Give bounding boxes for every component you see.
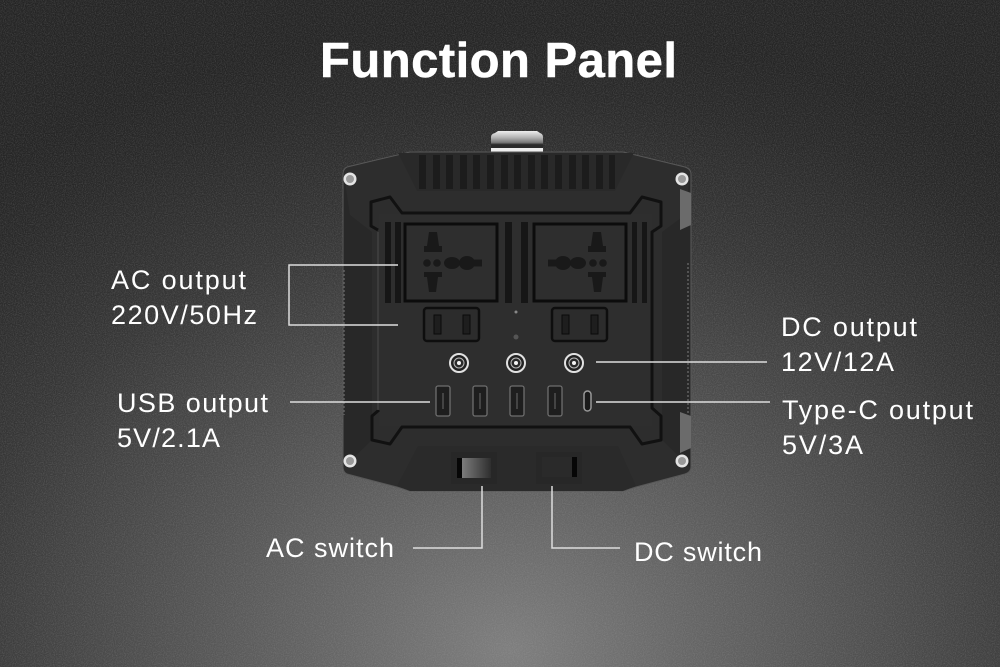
top vents [398,153,634,191]
label: AC switch: AC switch [266,533,394,563]
label: AC output [111,265,398,330]
label: USB output [117,388,430,453]
label: DC output: DC output [781,312,917,342]
label: AC switch [266,486,482,563]
side grips [680,189,691,230]
USB ports [436,386,562,416]
label: DC switch: DC switch [634,537,762,567]
handle [491,131,543,152]
label: Type-C output: Type-C output [782,395,973,425]
label: Type-C output: 5V/3A [782,430,863,460]
label: DC output: 12V/12A [781,347,894,377]
device body [343,152,691,491]
Type-C port [584,391,591,411]
label: DC switch [552,486,762,567]
two-pin outlets [424,308,607,341]
label: DC output [596,312,917,377]
DC switch [536,452,582,484]
corner screws [344,172,688,468]
label: Type-C output [596,395,973,460]
bottom bezel [397,446,636,491]
side vent slots [385,222,647,303]
label: AC output: 220V/50Hz [111,300,257,330]
label: USB output: 5V/2.1A [117,423,220,453]
side shading [344,175,372,467]
inner panel [371,197,661,444]
title: Function Panel [320,34,677,88]
power station device [343,131,691,491]
label: AC output: AC output [111,265,246,295]
label: USB output: USB output [117,388,268,418]
DC ports [450,354,583,372]
universal AC outlets [405,224,626,301]
AC switch [451,452,497,484]
